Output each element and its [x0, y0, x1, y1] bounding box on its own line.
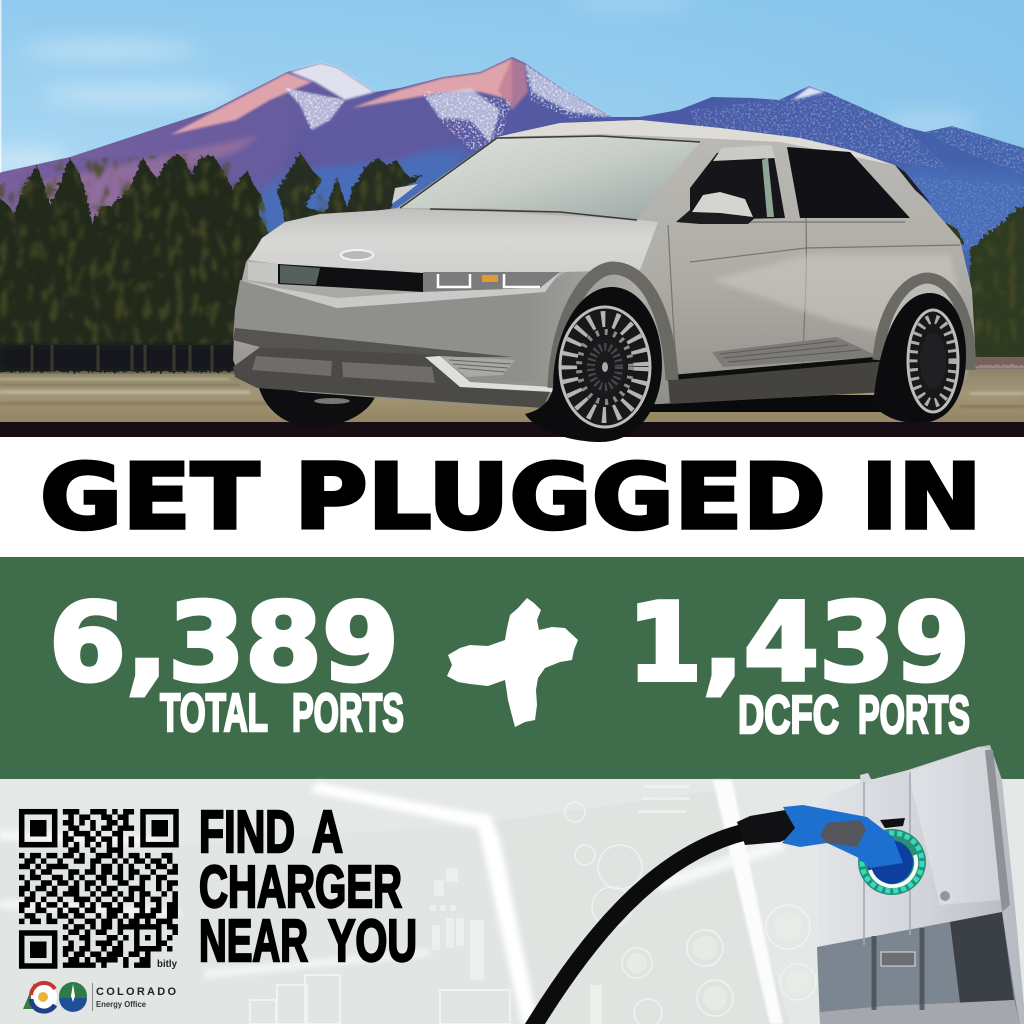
- icon: brush plus sign: [447, 598, 578, 727]
- door mirror: [676, 192, 755, 224]
- logo subline: Energy Office: [96, 1000, 147, 1009]
- panel: photo background with mountains and forest: [0, 0, 1024, 440]
- icon: EV wall charger unit: [817, 745, 1024, 1024]
- tech room background: [0, 780, 816, 1024]
- lower grille band: [233, 328, 513, 357]
- roof highlight: [497, 120, 893, 165]
- rear door window: [787, 147, 910, 218]
- dark ground band: [0, 422, 1024, 437]
- front wheel arch: [554, 268, 672, 388]
- title: GET PLUGGED IN: [40, 445, 982, 550]
- light bar: [248, 262, 560, 292]
- car: grey electric hatchback: [233, 120, 975, 442]
- rear spoiler glass: [895, 165, 932, 205]
- call to action text: FIND: [199, 799, 295, 865]
- forest silhouette: [0, 152, 1024, 372]
- rear wheel arch: [878, 278, 970, 370]
- statistic: DCFC ports number: 1,439: [627, 581, 970, 706]
- ground field: [0, 368, 1024, 424]
- side vent: [712, 337, 880, 367]
- bumper vent: [440, 356, 515, 377]
- logo wordmark: COLORADO: [96, 986, 176, 998]
- call to action text: CHARGER: [199, 854, 402, 920]
- call to action text: [199, 799, 417, 974]
- icon: charging cable: [530, 832, 745, 1024]
- call to action text: NEAR: [199, 908, 308, 974]
- windshield: [400, 136, 700, 220]
- rear wheel: [873, 293, 966, 423]
- right side trees: [970, 205, 1024, 365]
- label: DCFC ports: DCFC: [738, 685, 839, 745]
- label: DCFC ports: [738, 685, 970, 745]
- front bumper: [233, 270, 650, 385]
- front door window: [690, 145, 785, 220]
- lower bumper: [233, 347, 552, 408]
- clouds: [0, 0, 980, 172]
- far front wheel: [258, 385, 376, 427]
- bitly mark: bitly: [157, 959, 177, 970]
- front emblem: [341, 250, 373, 260]
- front wheel: [525, 287, 662, 442]
- statistic: total ports number: 6,389: [49, 581, 399, 706]
- hood: [249, 209, 658, 273]
- icon: charging port ring: [858, 829, 926, 895]
- silver strip under lights: [240, 272, 560, 308]
- logo: Colorado Energy Office: [23, 982, 176, 1012]
- mountain range: [0, 57, 1024, 300]
- call to action text: A: [312, 799, 343, 865]
- sill: [666, 358, 892, 404]
- door seams and character line: [668, 218, 960, 375]
- label: total ports: TOTAL: [160, 683, 268, 743]
- side mirror left: [392, 184, 418, 204]
- car body shell: [233, 120, 975, 408]
- call to action text: YOU: [328, 908, 417, 974]
- side lighter reflection: [712, 255, 960, 335]
- panel: call to action with charger: [0, 745, 1024, 1024]
- QR code: [19, 812, 178, 966]
- panel: green statistics band: [0, 557, 1024, 779]
- label: total ports: PORTS: [292, 683, 404, 743]
- icon: charging plug connector: [737, 805, 905, 868]
